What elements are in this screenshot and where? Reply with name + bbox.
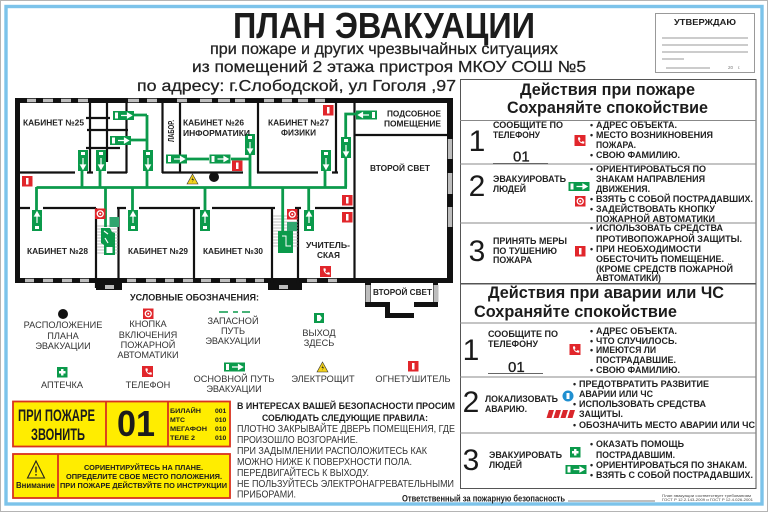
legend: spare route — [205, 312, 261, 346]
step 2: ИСПОЛЬЗОВАТЬ СРЕДСТВА — [579, 399, 707, 409]
room labels — [23, 108, 441, 297]
legend: extinguisher: ОГНЕТУШИТЕЛЬ — [375, 374, 451, 384]
emergency phone panel: ТЕЛЕ 2 — [170, 435, 195, 442]
legend: alarm button: ВКЛЮЧЕНИЯ — [119, 330, 177, 340]
legend: spare route: ЭВАКУАЦИИ — [205, 336, 261, 346]
warning panel: ПРИ ПОЖАРЕ ДЕЙСТВУЙТЕ ПО ИНСТРУКЦИИ — [60, 481, 227, 490]
step 1: ИМЕЮТСЯ ЛИ — [596, 345, 656, 355]
legend: plan location: ПЛАНА — [47, 331, 80, 341]
legend: exit here — [302, 313, 336, 348]
emergency phone panel: 010 — [215, 417, 227, 424]
fire panel heading: Действия при пожаре — [520, 81, 695, 99]
fire alarm buttons — [95, 208, 298, 220]
warning panel: ОПРЕДЕЛИТЕ СВОЕ МЕСТО ПОЛОЖЕНИЯ. — [66, 474, 222, 481]
step 3: • — [590, 223, 593, 233]
safety rules: ПРОИЗОШЛО ВОЗГОРАНИЕ. — [237, 435, 358, 446]
step 1: ЧТО СЛУЧИЛОСЬ. — [596, 336, 677, 346]
room labels: ВТОРОЙ СВЕТ — [370, 162, 431, 173]
step 2: • — [590, 164, 593, 174]
step 2: ЛОКАЛИЗОВАТЬ — [485, 394, 559, 404]
step 1: • — [590, 345, 593, 355]
step 3: ИСПОЛЬЗОВАТЬ СРЕДСТВА — [596, 223, 724, 233]
legend: alarm button — [117, 308, 179, 360]
safety rules: ПРИБОРАМИ. — [237, 490, 296, 500]
step 3: АВТОМАТИКИ) — [596, 273, 661, 283]
safety rules: В ИНТЕРЕСАХ ВАШЕЙ БЕЗОПАСНОСТИ ПРОСИМ — [237, 400, 455, 412]
step 3: ОБЕСТОЧИТЬ ПОМЕЩЕНИЕ. — [596, 254, 724, 264]
accident panel heading — [474, 284, 724, 321]
safety rules: НЕ ПОЛЬЗУЙТЕСЬ ЭЛЕКТРОНАГРЕВАТЕЛЬНЫМИ — [237, 477, 454, 490]
walls — [15, 98, 453, 318]
address: по адресу: г.Слободской, ул Гоголя ,97 — [137, 78, 456, 95]
step 2: ДВИЖЕНИЯ. — [596, 184, 650, 194]
legend: spare route: ЗАПАСНОЙ — [207, 315, 259, 326]
step 1: 01 — [508, 359, 525, 376]
room labels: ПОДСОБНОЕ — [387, 108, 441, 118]
legend heading: УСЛОВНЫЕ ОБОЗНАЧЕНИЯ: — [130, 292, 259, 302]
legend: electrical panel — [291, 362, 355, 384]
step 3: ПО ТУШЕНИЮ — [493, 246, 557, 256]
legend: extinguisher — [375, 361, 451, 384]
step 3: ЭВАКУИРОВАТЬ — [489, 450, 563, 460]
legend: electrical panel: ЭЛЕКТРОЩИТ — [291, 374, 355, 384]
safety rules: МОЖНО НИЖЕ К ПОВЕРХНОСТИ ПОЛА. — [237, 457, 412, 468]
step 2: • — [573, 420, 576, 430]
safety rules: ПЕРЕДВИГАЙТЕСЬ К ВЫХОДУ. — [237, 466, 369, 479]
legend: alarm button: АВТОМАТИКИ — [117, 350, 179, 360]
step 3: • — [590, 244, 593, 254]
electrical panel icon — [187, 174, 198, 184]
accident panel heading: Действия при аварии или ЧС — [488, 284, 724, 302]
step 2: ЗАЩИТЫ. — [579, 409, 623, 419]
step 1: СООБЩИТЕ ПО — [488, 329, 558, 339]
legend: plan location — [24, 309, 102, 351]
approval box — [656, 14, 754, 72]
legend — [24, 292, 451, 394]
safety rules: СОБЛЮДАТЬ СЛЕДУЮЩИЕ ПРАВИЛА: — [262, 413, 428, 424]
approval box: 20 — [728, 65, 734, 70]
emergency phone panel: ПРИ ПОЖАРЕ — [18, 406, 95, 425]
step 1: СООБЩИТЕ ПО — [493, 120, 563, 130]
step 3: 3 — [469, 235, 485, 268]
step 1: • — [590, 326, 593, 336]
safety rules: ПЛОТНО ЗАКРЫВАЙТЕ ДВЕРЬ ПОМЕЩЕНИЯ, ГДЕ — [237, 422, 455, 435]
step 2: 2 — [463, 386, 479, 419]
step 2: ПОЖАРНОЙ АВТОМАТИКИ — [596, 213, 715, 224]
step 1 — [463, 326, 680, 376]
room labels: КАБИНЕТ №26 — [183, 118, 244, 128]
step 2 — [463, 379, 756, 430]
step 2: ОБОЗНАЧИТЬ МЕСТО АВАРИИ ИЛИ ЧС — [579, 420, 756, 430]
step 2: • — [573, 399, 576, 409]
legend: alarm button: КНОПКА — [129, 319, 167, 329]
step 1: 01 — [513, 148, 530, 166]
room labels: КАБИНЕТ №30 — [203, 246, 263, 256]
safety rules — [237, 400, 455, 500]
accident panel heading: Сохраняйте спокойствие — [474, 303, 677, 321]
step 2: • — [573, 379, 576, 389]
room labels: КАБИНЕТ №29 — [128, 246, 188, 256]
step 2: ЗАДЕЙСТВОВАТЬ КНОПКУ — [596, 203, 716, 214]
legend: plan location: РАСПОЛОЖЕНИЕ — [24, 320, 102, 330]
evacuation route lines — [36, 114, 357, 231]
step 1: • — [590, 130, 593, 140]
step 3: ПРИНЯТЬ МЕРЫ — [493, 236, 567, 246]
warning panel: Внимание — [16, 481, 56, 490]
step 1 — [469, 120, 713, 166]
fire panel heading: Сохраняйте спокойствие — [507, 99, 708, 117]
step 3: 3 — [463, 444, 479, 477]
emergency phone panel: 010 — [215, 435, 227, 442]
emergency phone panel: 010 — [215, 426, 227, 433]
legend: main route: ОСНОВНОЙ ПУТЬ — [194, 373, 274, 384]
step 2: • — [590, 194, 593, 204]
emergency phone panel: БИЛАЙН — [170, 406, 201, 415]
room labels: КАБИНЕТ №25 — [23, 118, 84, 128]
step 1: ПОЖАРА. — [596, 140, 636, 150]
step 3: ЛЮДЕЙ — [489, 459, 522, 470]
step 1: СВОЮ ФАМИЛИЮ. — [596, 365, 680, 375]
floor plan — [15, 98, 453, 318]
room labels: ИНФОРМАТИКИ — [183, 128, 250, 138]
step 3: ОКАЗАТЬ ПОМОЩЬ — [596, 439, 685, 449]
step 1: 1 — [469, 125, 485, 158]
legend: main route: ЭВАКУАЦИИ — [206, 384, 262, 394]
step 1: АДРЕС ОБЪЕКТА. — [596, 120, 677, 130]
step 2: ВЗЯТЬ С СОБОЙ ПОСТРАДАВШИХ. — [596, 193, 753, 204]
step 2: 2 — [469, 170, 485, 203]
legend: first aid — [41, 367, 84, 390]
emergency phone panel: МТС — [170, 417, 185, 424]
step 1: ТЕЛЕФОНУ — [488, 339, 539, 349]
responsible person line: Ответственный за пожарную безопасность — [402, 494, 565, 504]
step 2 — [469, 164, 753, 224]
subtitle line 1: при пожаре и других чрезвычайных ситуациях — [210, 41, 558, 58]
emergency phone panel — [13, 401, 230, 447]
room labels: КАБИНЕТ №27 — [268, 118, 329, 128]
step 2: ОРИЕНТИРОВАТЬСЯ ПО — [596, 164, 706, 174]
step 3: ВЗЯТЬ С СОБОЙ ПОСТРАДАВШИХ. — [596, 469, 753, 480]
step 3: ПРОТИВОПОЖАРНОЙ ЗАЩИТЫ. — [596, 233, 742, 244]
room labels: ЛАБОР. — [166, 120, 176, 142]
emergency phone panel: 001 — [215, 408, 227, 415]
step 2: АВАРИЮ. — [485, 404, 527, 414]
exit signs — [32, 110, 377, 255]
step 2: ЭВАКУИРОВАТЬ — [493, 174, 567, 184]
room labels: КАБИНЕТ №28 — [27, 246, 88, 256]
legend: plan location: ЭВАКУАЦИИ — [35, 341, 91, 351]
room labels: ВТОРОЙ СВЕТ — [373, 286, 433, 297]
step 3: • — [590, 439, 593, 449]
room labels: УЧИТЕЛЬ- — [306, 240, 350, 250]
step 3: ПРИ НЕОБХОДИМОСТИ — [596, 244, 701, 254]
step 3: • — [590, 470, 593, 480]
step 1: • — [590, 120, 593, 130]
emergency phone panel: 01 — [117, 403, 155, 444]
step 3 — [463, 439, 753, 480]
step 3 — [469, 223, 742, 283]
stairs — [97, 216, 298, 253]
step 1: ПОСТРАДАВШИЕ. — [596, 355, 676, 365]
step 1: • — [590, 365, 593, 375]
windows — [25, 99, 452, 302]
room labels: ФИЗИКИ — [281, 128, 316, 138]
legend: spare route: ПУТЬ — [221, 326, 245, 336]
standards note: ГОСТ Р 12.2.143-2009 и ГОСТ Р 12.4.026-2001 — [662, 498, 753, 502]
step 1: • — [590, 150, 593, 160]
title: ПЛАН ЭВАКУАЦИИ — [233, 5, 535, 46]
standards note: План эвакуации соответствует требованиям — [662, 494, 751, 498]
legend: main route — [194, 362, 274, 394]
step 1: • — [590, 336, 593, 346]
legend: exit here: ВЫХОД — [302, 328, 336, 338]
subtitle line 2: из помещений 2 этажа пристроя МКОУ СОШ №5 — [192, 59, 586, 76]
warning panel — [13, 454, 230, 498]
room labels: ПОМЕЩЕНИЕ — [384, 118, 441, 128]
step 3: (КРОМЕ СРЕДСТВ ПОЖАРНОЙ — [596, 263, 733, 274]
step 1: СВОЮ ФАМИЛИЮ. — [596, 150, 680, 160]
emergency phone panel: ЗВОНИТЬ — [31, 425, 85, 444]
warning panel: СОРИЕНТИРУЙТЕСЬ НА ПЛАНЕ. — [84, 463, 203, 472]
legend: phone: ТЕЛЕФОН — [126, 380, 170, 390]
step 2: ЗНАКАМ НАПРАВЛЕНИЯ — [596, 174, 705, 184]
approval box: г. — [738, 65, 740, 70]
step 3: ПОСТРАДАВШИМ. — [596, 450, 675, 460]
step 2: ЛЮДЕЙ — [493, 183, 526, 194]
step 1: МЕСТО ВОЗНИКНОВЕНИЯ — [596, 130, 713, 140]
legend: first aid: АПТЕЧКА — [41, 380, 84, 390]
phone icon — [320, 266, 331, 277]
step 2: ПРЕДОТВРАТИТЬ РАЗВИТИЕ — [579, 379, 709, 389]
step 3: ОРИЕНТИРОВАТЬСЯ ПО ЗНАКАМ. — [596, 460, 747, 470]
step 1: АДРЕС ОБЪЕКТА. — [596, 326, 677, 336]
legend: exit here: ЗДЕСЬ — [304, 338, 334, 348]
standards note — [662, 494, 753, 502]
step 1: 1 — [463, 334, 479, 367]
panel: accident actions — [460, 284, 756, 488]
legend: phone — [126, 366, 170, 390]
step 1: ТЕЛЕФОНУ — [493, 130, 540, 140]
emergency phone panel: МЕГАФОН — [170, 426, 207, 433]
approval box: УТВЕРЖДАЮ — [674, 17, 736, 27]
step 3: ПОЖАРА — [493, 255, 533, 265]
legend: alarm button: ПОЖАРНОЙ — [121, 339, 175, 350]
room labels: СКАЯ — [317, 250, 340, 260]
safety rules: ПРИ ЗАДЫМЛЕНИИ РАСПОЛОЖИТЕСЬ КАК — [237, 446, 427, 457]
fire panel heading — [507, 81, 708, 117]
step 3: • — [590, 460, 593, 470]
fire extinguishers — [22, 105, 352, 222]
step 2: • — [590, 204, 593, 214]
step 2: АВАРИИ ИЛИ ЧС — [579, 389, 654, 399]
you are here dot — [209, 172, 219, 182]
panel: fire actions — [460, 80, 756, 284]
